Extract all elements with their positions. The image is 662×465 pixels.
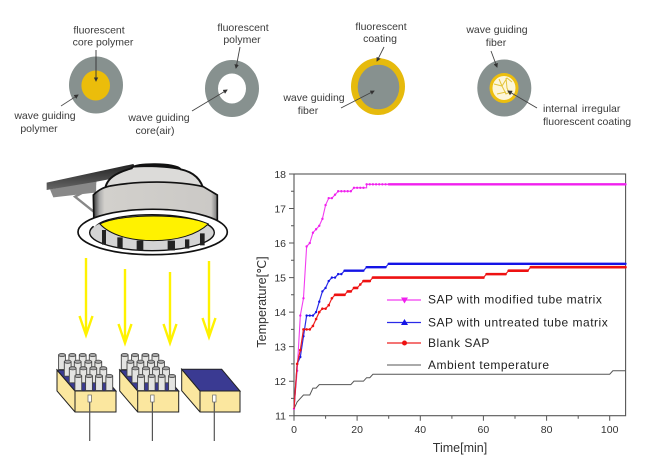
line chart: temperature vs time <box>255 169 626 455</box>
block top <box>57 370 116 391</box>
y axis tick labels: 11 <box>275 411 286 423</box>
fiber cross-section: core <box>69 56 123 114</box>
y axis tick labels: 12 <box>274 376 286 388</box>
label: wave guiding fiber: fiber <box>298 105 319 117</box>
label: fluorescent polymer: polymer <box>223 34 261 46</box>
data series <box>294 184 625 409</box>
y axis tick labels: 18 <box>274 169 286 181</box>
tube array <box>59 353 113 390</box>
label: internal irregular fluorescent coating: internal irregular <box>543 103 621 115</box>
arrow: to polymer <box>61 95 78 106</box>
label: wave guiding polymer: wave guiding <box>13 110 76 122</box>
legend: blank SAP: Blank SAP <box>428 336 490 350</box>
sample block 1 with tube matrix <box>57 353 116 441</box>
label: wave guiding fiber: wave guiding <box>465 24 528 36</box>
y axis tick labels: 14 <box>274 307 286 319</box>
diagram: hollow fiber <box>127 22 269 137</box>
legend <box>387 292 608 372</box>
block base <box>182 369 240 412</box>
lamp inner well <box>90 215 214 251</box>
lamp bracket <box>47 164 140 213</box>
lamp baffle stripes <box>102 230 205 250</box>
label: fluorescent coating: coating <box>363 33 397 45</box>
x axis title: Time[min] <box>433 441 487 455</box>
axis ticks <box>289 174 610 421</box>
diagram: coated fiber <box>282 21 407 117</box>
label: wave guiding core(air): wave guiding <box>127 112 190 124</box>
block edge <box>74 391 76 412</box>
fiber cross-section: coating <box>351 58 405 115</box>
y axis tick labels: 15 <box>274 273 286 285</box>
arrow: to polymer <box>236 47 240 68</box>
series: blank SAP <box>294 267 625 409</box>
block base <box>57 370 116 412</box>
x axis tick labels: 80 <box>541 424 553 436</box>
arrow: to core <box>95 50 97 81</box>
label: wave guiding core(air): core(air) <box>135 125 175 137</box>
block edge <box>199 391 201 412</box>
legend: untreated tube matrix: SAP with untreated tube matrix <box>428 316 608 330</box>
arrow: to air core <box>192 90 227 111</box>
x axis tick labels: 60 <box>478 424 489 436</box>
series: ambient temperature <box>294 371 625 409</box>
block top <box>182 369 240 391</box>
sample block 2 with tube matrix <box>120 353 179 441</box>
sensor probe <box>213 395 216 441</box>
x axis tick labels <box>291 424 619 436</box>
fiber cross-section: ring <box>205 60 259 117</box>
label: wave guiding fiber: wave guiding <box>282 92 345 104</box>
legend: blank SAP <box>387 336 490 350</box>
arrow 3 <box>164 272 176 343</box>
y axis tick labels: 17 <box>274 204 286 216</box>
sensor probe <box>88 395 91 441</box>
lamp rim <box>93 211 214 226</box>
lamp cap <box>132 164 181 170</box>
lamp housing <box>93 182 217 226</box>
arrow 4 <box>202 261 216 337</box>
lamp ring <box>78 209 227 255</box>
label: internal irregular fluorescent coating: fluorescent coating <box>543 116 631 128</box>
series: modified tube matrix <box>294 184 625 409</box>
x axis tick labels: 20 <box>351 424 363 436</box>
illustration: ceiling lamp <box>47 164 227 255</box>
plot frame <box>294 174 626 416</box>
lamp lens <box>100 216 208 241</box>
legend: modified tube matrix: SAP with modified tube matrix <box>428 292 602 306</box>
arrow: to coating <box>377 47 384 61</box>
series: untreated tube matrix <box>294 264 625 409</box>
x axis tick labels: 40 <box>414 424 426 436</box>
arrow 1 <box>80 258 92 335</box>
x axis tick labels: 0 <box>291 424 297 436</box>
diagram: fluorescent core fiber <box>13 24 134 135</box>
arrow: to fiber <box>491 51 497 67</box>
x axis tick labels: 100 <box>601 424 619 436</box>
arrow 2 <box>118 269 132 343</box>
label: fluorescent core polymer: fluorescent <box>73 24 125 36</box>
lamp dome <box>105 164 204 192</box>
label: fluorescent polymer: fluorescent <box>217 22 269 34</box>
label: fluorescent coating: fluorescent <box>355 21 407 33</box>
label: fluorescent core polymer: core polymer <box>73 36 134 48</box>
label: wave guiding polymer: polymer <box>20 123 58 135</box>
fiber cross-section: irregular coating <box>477 60 531 116</box>
arrow: to fiber <box>341 91 374 108</box>
legend: ambient temperature: Ambient temperature <box>428 358 550 372</box>
y axis tick labels: 16 <box>274 238 286 250</box>
y axis tick labels: 13 <box>274 342 286 354</box>
arrow: to coating <box>508 91 537 108</box>
label: wave guiding fiber: fiber <box>486 37 507 49</box>
diagram: irregular coating fiber <box>465 24 631 128</box>
y axis tick labels <box>274 169 286 423</box>
sample block 3 blank <box>182 369 240 441</box>
light arrows <box>80 258 216 343</box>
y axis title: Temperature[℃] <box>255 256 269 348</box>
